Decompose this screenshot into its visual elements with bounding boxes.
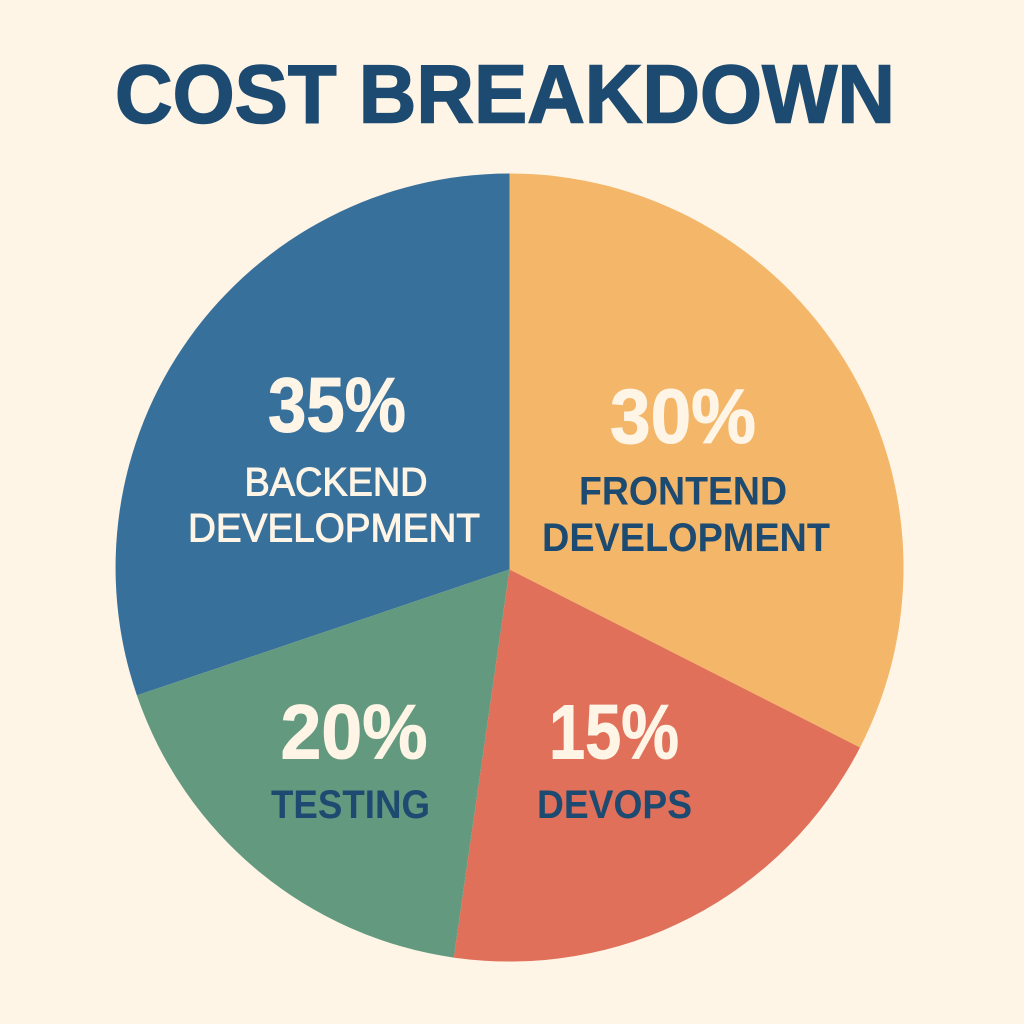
title: COST BREAKDOWN — [115, 48, 895, 140]
slice: devops — [454, 570, 860, 962]
label: backend: DEVELOPMENT — [188, 506, 480, 550]
label: frontend — [542, 374, 830, 560]
label: devops: 15% — [549, 690, 679, 776]
label: testing — [271, 690, 430, 827]
slice: backend development — [116, 174, 510, 695]
label: backend: BACKEND — [244, 460, 428, 504]
label: backend — [188, 362, 480, 550]
slice: frontend development — [510, 174, 904, 748]
label: backend: 35% — [268, 362, 406, 448]
label: frontend: 30% — [610, 374, 756, 460]
label: devops: DEVOPS — [537, 783, 692, 827]
label: devops — [537, 690, 692, 827]
label: testing: TESTING — [271, 783, 430, 827]
label: testing: 20% — [280, 690, 428, 776]
label: frontend: DEVELOPMENT — [542, 516, 830, 560]
pie chart — [116, 174, 904, 962]
slice: testing — [137, 570, 510, 958]
label: frontend: FRONTEND — [579, 470, 787, 514]
